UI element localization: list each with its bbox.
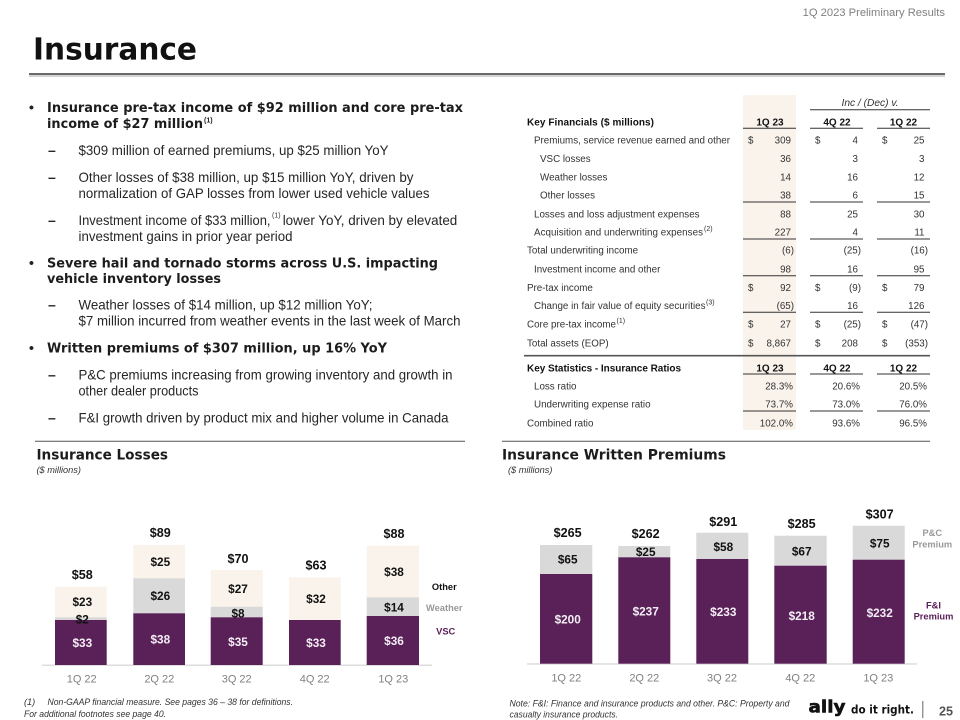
row: premiums: Premiums, service revenue earned and other [534, 136, 731, 147]
unit note: ($ millions) [508, 465, 552, 475]
sub-bullet: F&I growth: F&I growth driven by product mix and higher volume in Canada [78, 409, 449, 425]
logo: ally do it right: do it right. [851, 702, 914, 716]
footer divider [922, 701, 923, 718]
row: VSC losses: 3 [919, 154, 925, 165]
row: investment income: 16 [847, 265, 859, 276]
legend: VSC [436, 627, 456, 637]
sub-bullet: investment income [48, 212, 457, 244]
stacked bar chart: losses [42, 526, 463, 685]
bullet: pre-tax income: income of $27 million [47, 116, 203, 132]
bar: 4Q 22 [289, 558, 341, 665]
row: investment income [534, 265, 925, 276]
row: combined ratio: 93.6% [832, 418, 860, 429]
row: header: 1Q 23 [756, 117, 784, 128]
row: total assets: $ [748, 339, 754, 350]
heading: insurance losses: Insurance Losses [36, 447, 168, 463]
panel: insurance written premiums [502, 441, 953, 685]
bar: 3Q 22: $291 [709, 515, 737, 529]
row: weather losses: 12 [914, 173, 924, 184]
row: key statistics header: 4Q 22 [823, 363, 851, 374]
row: loss ratio [534, 382, 927, 393]
row: key statistics header: Key Statistics - Insurance Ratios [527, 363, 681, 374]
row: acquisition expenses: (2) [704, 226, 713, 233]
bullet: storms: Severe hail and tornado storms across U.S. impacting [47, 256, 438, 272]
sub-bullet: other losses [48, 169, 430, 201]
axis labels: 2Q 22 [629, 673, 659, 685]
row: underwriting expense ratio: 73.7% [765, 400, 793, 411]
row: pre-tax income: $ [748, 283, 754, 294]
axis labels: 1Q 23 [863, 673, 893, 685]
legend: Premium [912, 539, 952, 549]
bullet: written premiums: • [29, 340, 34, 356]
row: total assets: 208 [842, 339, 859, 350]
row: investment income: 95 [914, 265, 925, 276]
axis labels [551, 673, 893, 685]
row: weather losses: 16 [847, 173, 859, 184]
bar: 2Q 22: $237 [633, 604, 659, 618]
bar: 3Q 22: $27 [228, 582, 248, 596]
row: combined ratio: Combined ratio [527, 418, 594, 429]
bar: 2Q 22: $25 [636, 545, 656, 559]
bar: 1Q 23: $38 [384, 565, 404, 579]
footnotes: For additional footnotes see page 40. [24, 709, 166, 719]
sub-bullet: earned premiums: – [48, 142, 56, 158]
bar: 4Q 22: $285 [788, 517, 816, 531]
bullet: storms: vehicle inventory losses [47, 271, 221, 287]
axis labels: 1Q 22 [551, 673, 581, 685]
row: weather losses [540, 173, 924, 184]
row: combined ratio: 96.5% [899, 418, 927, 429]
sub-bullet: investment income: (1) [272, 212, 281, 220]
row: other losses: 15 [914, 191, 925, 202]
bar: 3Q 22: $58 [713, 540, 734, 554]
page header label: 1Q 2023 Preliminary Results [803, 7, 945, 19]
note: Note: F&I: Finance and insurance products and other. P&C: Property and [510, 698, 790, 708]
row: core pre-tax income [527, 318, 928, 331]
footnotes: Non-GAAP financial measure. See pages 36 – 38 for definitions. [48, 697, 293, 707]
row: premiums: 4 [853, 136, 859, 147]
sub-bullet: investment income: Investment income of $33 million, [78, 212, 270, 228]
row: VSC losses [540, 154, 925, 165]
row: VSC losses: 36 [780, 154, 792, 165]
row: losses and LAE: Losses and loss adjustment expenses [534, 210, 700, 221]
legend: F&I [926, 600, 941, 610]
bar: 1Q 23: $232 [867, 606, 893, 620]
bullet: written premiums: Written premiums of $307 million, up 16% YoY [47, 340, 387, 356]
stacked bar chart: premiums [527, 508, 953, 685]
row: core pre-tax income: Core pre-tax income [527, 320, 617, 331]
panel: key takeaways [29, 99, 463, 425]
bar: 1Q 22: $265 [554, 526, 582, 540]
row: change in fair value: 126 [908, 301, 925, 312]
bullet: pre-tax income: (1) [204, 118, 213, 124]
sub-bullet: earned premiums: $309 million of earned premiums, up $25 million YoY [78, 142, 389, 158]
bar: 2Q 22 [618, 527, 670, 664]
bullet: pre-tax income: • [29, 99, 34, 115]
row: losses and LAE [534, 210, 925, 221]
bar: 1Q 22: $33 [72, 636, 93, 650]
heading: written premiums: Insurance Written Premiums [502, 447, 726, 463]
row: pre-tax income: $ [815, 283, 821, 294]
row: premiums: $ [882, 136, 888, 147]
row: change in fair value: (3) [706, 300, 715, 306]
row: pre-tax income: (9) [849, 283, 861, 294]
bar: 1Q 22: $200 [555, 612, 581, 626]
bar: 3Q 22: $70 [227, 552, 249, 566]
row: total assets: Total assets (EOP) [527, 339, 609, 350]
row: change in fair value: 16 [847, 301, 859, 312]
row: core pre-tax income: $ [882, 320, 888, 331]
bar: 4Q 22: $32 [306, 592, 326, 606]
legend [426, 582, 463, 637]
row: acquisition expenses: 4 [853, 228, 859, 239]
row: total underwriting income [527, 246, 928, 257]
row: acquisition expenses: 227 [775, 228, 791, 239]
row: other losses: Other losses [540, 191, 595, 202]
bar: 3Q 22: $233 [710, 605, 737, 619]
row: VSC losses: 3 [853, 154, 859, 165]
row: core pre-tax income: $ [748, 320, 754, 331]
legend: P&C [922, 528, 942, 538]
bar: 1Q 23: $307 [866, 508, 894, 522]
axis labels: 2Q 22 [144, 673, 174, 685]
row: loss ratio: 28.3% [765, 382, 793, 393]
row: pre-tax income: 79 [914, 283, 924, 294]
axis labels: 1Q 22 [67, 673, 97, 685]
sub-bullet: other losses: Other losses of $38 million, up $15 million YoY, driven by [78, 169, 414, 185]
sub-bullet: P&C premiums: P&C premiums increasing from growing inventory and growth in [78, 366, 452, 382]
bar: 2Q 22 [133, 526, 185, 665]
bar: 1Q 23: $36 [384, 634, 404, 648]
sub-bullet: investment income: investment gains in prior year period [78, 228, 292, 244]
row: losses and LAE: 25 [847, 210, 859, 221]
row: combined ratio: 102.0% [760, 418, 793, 429]
unit note: ($ millions) [36, 465, 81, 475]
row: investment income: 98 [780, 265, 792, 276]
footnotes [24, 697, 293, 719]
bar: 1Q 22: $58 [72, 568, 93, 582]
sub-bullet: P&C premiums: other dealer products [78, 382, 198, 398]
bullet: storms: • [29, 254, 34, 270]
row: other losses: 38 [780, 191, 792, 202]
row: loss ratio: 20.5% [899, 382, 927, 393]
legend: Weather [426, 603, 463, 613]
bar: 1Q 23: $14 [384, 600, 404, 614]
bar: 1Q 22: $23 [72, 595, 93, 609]
bar: 4Q 22: $218 [789, 609, 815, 623]
legend: Premium [914, 611, 953, 621]
row: loss ratio: 20.6% [832, 382, 860, 393]
sub-bullet: other losses: normalization of GAP losses from lower used vehicle values [78, 185, 430, 201]
comparison heading: Inc / (Dec) v. [842, 98, 898, 109]
bar: 4Q 22: $33 [306, 636, 326, 650]
bar: 2Q 22: $262 [632, 527, 660, 541]
bar: 2Q 22: $38 [150, 632, 171, 646]
bar: 1Q 23: $88 [383, 527, 405, 541]
row: change in fair value [534, 300, 925, 312]
row: core pre-tax income: 27 [780, 320, 791, 331]
bar: 1Q 23 [853, 508, 905, 664]
bar: 1Q 22 [55, 568, 107, 665]
row: loss ratio: Loss ratio [534, 382, 577, 393]
note: casualty insurance products. [510, 709, 618, 719]
sub-bullet: investment income: lower YoY, driven by elevated [283, 212, 457, 228]
panel: key financials table [524, 95, 930, 430]
bar: 1Q 23: $75 [870, 536, 890, 550]
row: header: Key Financials ($ millions) [527, 117, 654, 128]
row: key statistics header [527, 363, 918, 374]
bullet: pre-tax income [29, 99, 463, 132]
title rule [29, 73, 945, 77]
axis labels: 3Q 22 [707, 673, 737, 685]
row: key statistics header: 1Q 23 [756, 363, 784, 374]
bar: 3Q 22 [211, 552, 263, 665]
bar: 4Q 22: $67 [792, 544, 812, 558]
row: key statistics header: 1Q 22 [890, 363, 918, 374]
sub-bullet: F&I growth: – [48, 409, 56, 425]
legend [912, 528, 953, 621]
row: change in fair value: Change in fair value of equity securities [534, 301, 706, 312]
row: total assets [527, 339, 928, 350]
sub-bullet: weather losses [48, 296, 460, 328]
row: acquisition expenses: 11 [914, 228, 924, 239]
row: total underwriting income: (25) [844, 246, 861, 257]
row: losses and LAE: 88 [780, 210, 792, 221]
row: losses and LAE: 30 [914, 210, 925, 221]
bar: 4Q 22: $63 [305, 558, 327, 572]
row: weather losses: 14 [780, 173, 792, 184]
row: premiums: $ [748, 136, 754, 147]
sub-bullet: weather losses: – [48, 296, 56, 312]
row: other losses [540, 191, 925, 202]
row: total assets: $ [882, 339, 888, 350]
row: total assets: 8,867 [766, 339, 791, 350]
sub-bullet: investment income: – [48, 212, 56, 228]
bar: 4Q 22 [774, 517, 827, 664]
sub-bullet: P&C premiums [48, 366, 452, 398]
row: core pre-tax income: $ [815, 320, 821, 331]
row: underwriting expense ratio [534, 400, 927, 411]
bar: 3Q 22 [696, 515, 748, 664]
row: acquisition expenses [534, 226, 924, 239]
legend: Other [432, 582, 457, 592]
row: premiums: 309 [775, 136, 791, 147]
page number: 25 [939, 704, 953, 718]
row: underwriting expense ratio: 76.0% [899, 400, 927, 411]
panel: insurance losses [35, 441, 465, 685]
sub-bullet: weather losses: $7 million incurred from weather events in the last week of March [78, 312, 460, 328]
axis labels: 4Q 22 [785, 673, 815, 685]
row: acquisition expenses: Acquisition and underwriting expenses [534, 228, 703, 239]
sub-bullet: weather losses: Weather losses of $14 million, up $12 million YoY; [78, 296, 372, 312]
row: pre-tax income: $ [882, 283, 888, 294]
bar: 3Q 22: $35 [228, 635, 248, 649]
bar: 2Q 22: $25 [150, 555, 171, 569]
row: header [527, 117, 918, 128]
bar: 2Q 22: $89 [150, 526, 171, 540]
logo: ally do it right [808, 698, 914, 718]
row: investment income: Investment income and other [534, 265, 661, 276]
row: premiums: 25 [914, 136, 925, 147]
logo: ally do it right: ally [808, 698, 846, 718]
highlighted 1Q 23 column [743, 95, 796, 430]
row: premiums [534, 136, 925, 147]
row: premiums: $ [815, 136, 821, 147]
row: VSC losses: VSC losses [540, 154, 591, 165]
row: underwriting expense ratio: Underwriting expense ratio [534, 400, 651, 411]
bar: 3Q 22: $8 [231, 606, 245, 620]
title: Insurance [33, 32, 197, 68]
axis labels: 3Q 22 [222, 673, 252, 685]
row: total underwriting income: Total underwriting income [527, 246, 639, 257]
bar: 1Q 22: $65 [558, 552, 578, 566]
axis labels: 4Q 22 [300, 673, 330, 685]
row: header: 1Q 22 [890, 117, 918, 128]
row: core pre-tax income: (47) [911, 320, 928, 331]
bullet: storms [29, 254, 438, 287]
row: total assets: $ [815, 339, 821, 350]
bullet: pre-tax income: Insurance pre-tax income of $92 million and core pre-tax [47, 100, 463, 116]
sub-bullet: other losses: – [48, 169, 56, 185]
note [510, 698, 790, 719]
row: header: 4Q 22 [823, 117, 851, 128]
bar: 2Q 22: $26 [150, 589, 171, 603]
row: change in fair value: (65) [777, 301, 794, 312]
axis labels [67, 673, 408, 685]
bar: 1Q 22 [540, 526, 592, 664]
footnotes: (1) [24, 697, 35, 707]
row: pre-tax income: Pre-tax income [527, 283, 593, 294]
row: core pre-tax income: (25) [844, 320, 861, 331]
bar: 1Q 22: $2 [76, 612, 89, 626]
row: combined ratio [527, 418, 927, 429]
row: total underwriting income: (16) [911, 246, 928, 257]
row: pre-tax income: 92 [780, 283, 791, 294]
bar: 1Q 23 [367, 527, 419, 665]
row: weather losses: Weather losses [540, 173, 607, 184]
row: core pre-tax income: (1) [616, 318, 625, 325]
row: total underwriting income: (6) [782, 246, 794, 257]
sub-bullet: P&C premiums: – [48, 366, 56, 382]
axis labels: 1Q 23 [378, 673, 408, 685]
row: pre-tax income [527, 283, 924, 294]
row: total assets: (353) [905, 339, 928, 350]
row: other losses: 6 [853, 191, 859, 202]
row: underwriting expense ratio: 73.0% [832, 400, 860, 411]
